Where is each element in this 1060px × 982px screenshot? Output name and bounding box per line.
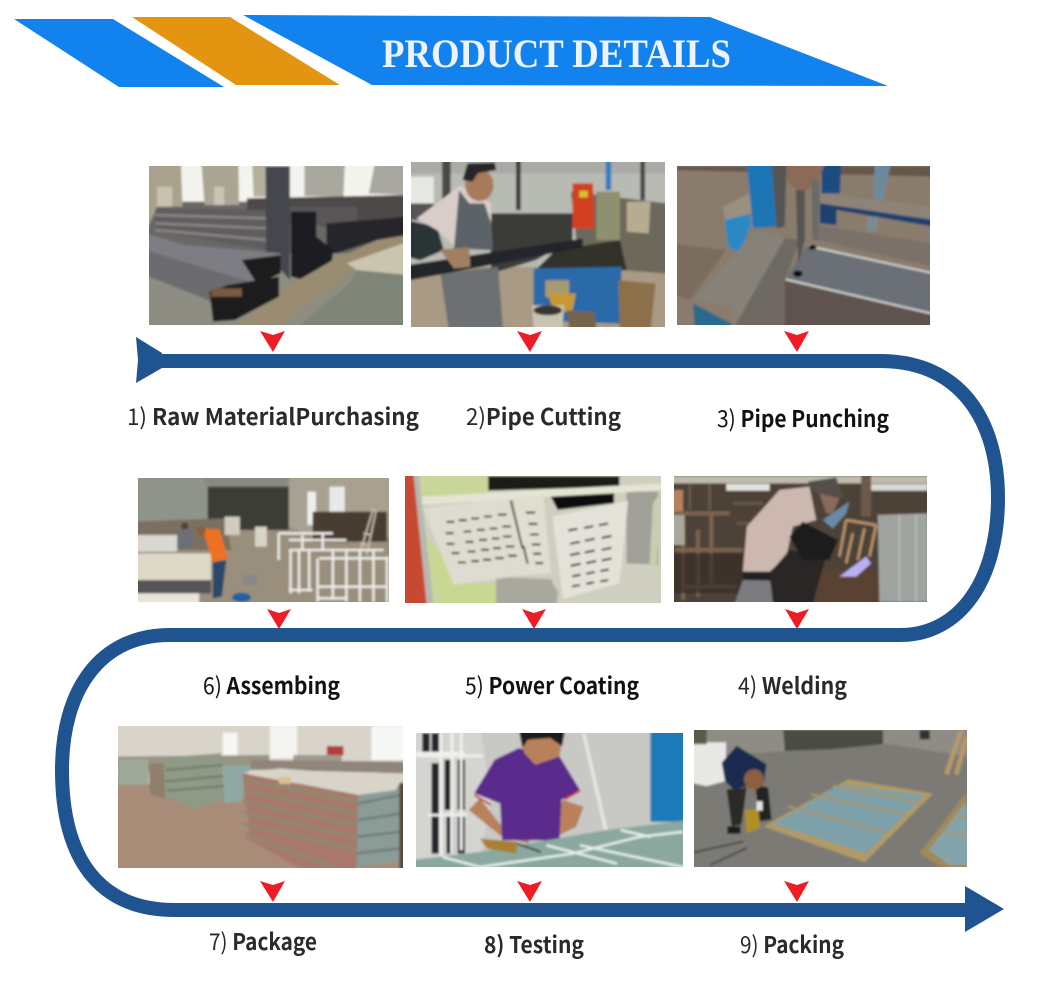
photo 7: packaged stacks xyxy=(118,726,403,868)
red step markers xyxy=(260,331,809,902)
photo 4: welding worker xyxy=(674,476,927,602)
step labels xyxy=(127,398,889,960)
photo 5: powder coated panels xyxy=(405,476,661,603)
title: PRODUCT DETAILS xyxy=(382,31,731,76)
header banner xyxy=(14,15,888,87)
label 9: 9) Packing xyxy=(740,926,844,960)
label 2: 2)Pipe Cutting xyxy=(466,398,621,432)
flow line: serpentine blue arrow xyxy=(62,337,1004,932)
arrow head at end xyxy=(965,886,1004,932)
arrow tail at start xyxy=(136,337,162,383)
photo 2: pipe cutting worker xyxy=(411,162,665,327)
label 7: 7) Package xyxy=(209,923,317,957)
label 1: 1) Raw MaterialPurchasing xyxy=(127,398,419,432)
photo 6: assembling workshop xyxy=(138,478,389,602)
label 3: 3) Pipe Punching xyxy=(717,400,889,434)
label 5: 5) Power Coating xyxy=(465,667,639,701)
photo 1: raw material stacks xyxy=(149,166,403,325)
label 8: 8) Testing xyxy=(484,926,584,960)
photo 9: packing glass in wooden frames xyxy=(694,730,967,867)
label 4: 4) Welding xyxy=(738,667,847,701)
photo 3: drilling pipe punching xyxy=(677,166,930,325)
photo 8: testing worker in purple shirt xyxy=(416,733,683,867)
label 6: 6) Assembing xyxy=(203,667,340,701)
